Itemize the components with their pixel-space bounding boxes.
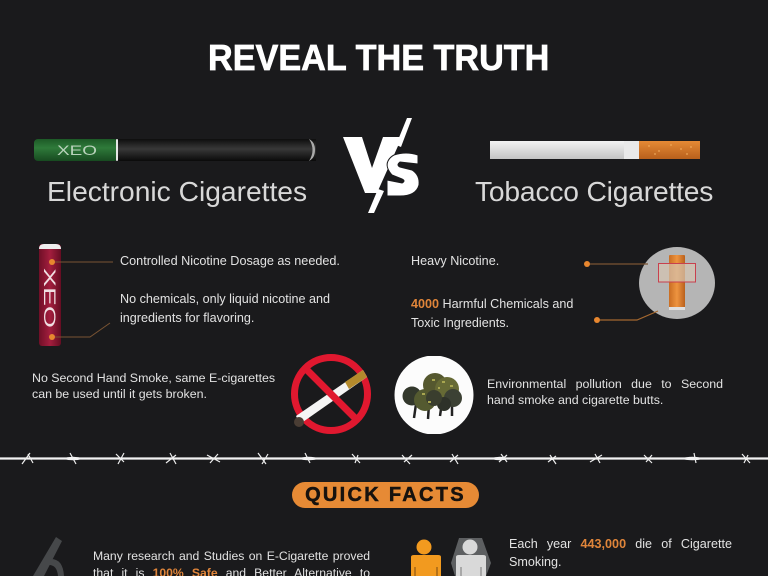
text: no chemicals: ingredients for flavoring. <box>120 311 254 325</box>
text: 4000 harmful chemicals: 4000 Harmful Chemicals and <box>411 297 573 311</box>
text: research <box>93 549 370 576</box>
text: no second hand smoke: No Second Hand Smoke, same E-cigarettes <box>32 371 275 385</box>
text: environmental pollution <box>487 377 723 406</box>
icon: filter magnifier with callouts <box>584 247 715 323</box>
text: 4000 harmful chemicals <box>411 297 573 330</box>
text: no second hand smoke <box>32 371 275 400</box>
text: each year: Smoking. <box>509 555 562 569</box>
text: each year <box>509 537 732 569</box>
heading: electronic cigarettes: Electronic Cigarettes <box>47 175 307 207</box>
text: each year: Each year 443,000 die of Cigarette <box>509 537 732 551</box>
barbed wire divider <box>0 452 768 464</box>
icon: grey pipe <box>33 537 64 576</box>
text: 4000 harmful chemicals: Toxic Ingredients. <box>411 316 509 330</box>
text: no second hand smoke: can be used until it gets broken. <box>32 386 207 400</box>
icon: xeo cartridge with callouts <box>39 244 113 346</box>
quick facts badge: QUICK FACTS <box>305 484 466 506</box>
icon: no smoking <box>291 354 371 434</box>
icon: people <box>411 538 491 576</box>
text: no chemicals: No chemicals, only liquid nicotine and <box>120 292 330 306</box>
text: environmental pollution: Environmental pollution due to Second <box>487 377 723 391</box>
text: no chemicals <box>120 292 330 325</box>
text: environmental pollution: hand smoke and cigarette butts. <box>487 392 663 406</box>
vs emblem <box>343 118 419 213</box>
title: REVEAL THE TRUTH <box>208 37 549 78</box>
icon: trees <box>394 356 474 434</box>
tobacco cigarette <box>490 141 700 159</box>
heading: tobacco cigarettes: Tobacco Cigarettes <box>475 175 713 207</box>
text: heavy nicotine: Heavy Nicotine. <box>411 254 499 268</box>
text: controlled nicotine: Controlled Nicotine Dosage as needed. <box>120 254 340 268</box>
electronic cigarette <box>34 139 316 161</box>
electronic cigarette: XEO <box>57 142 97 158</box>
icon: xeo cartridge with callouts: XEO <box>40 268 59 328</box>
text: research: Many research and Studies on E-Cigarette proved <box>93 549 370 563</box>
